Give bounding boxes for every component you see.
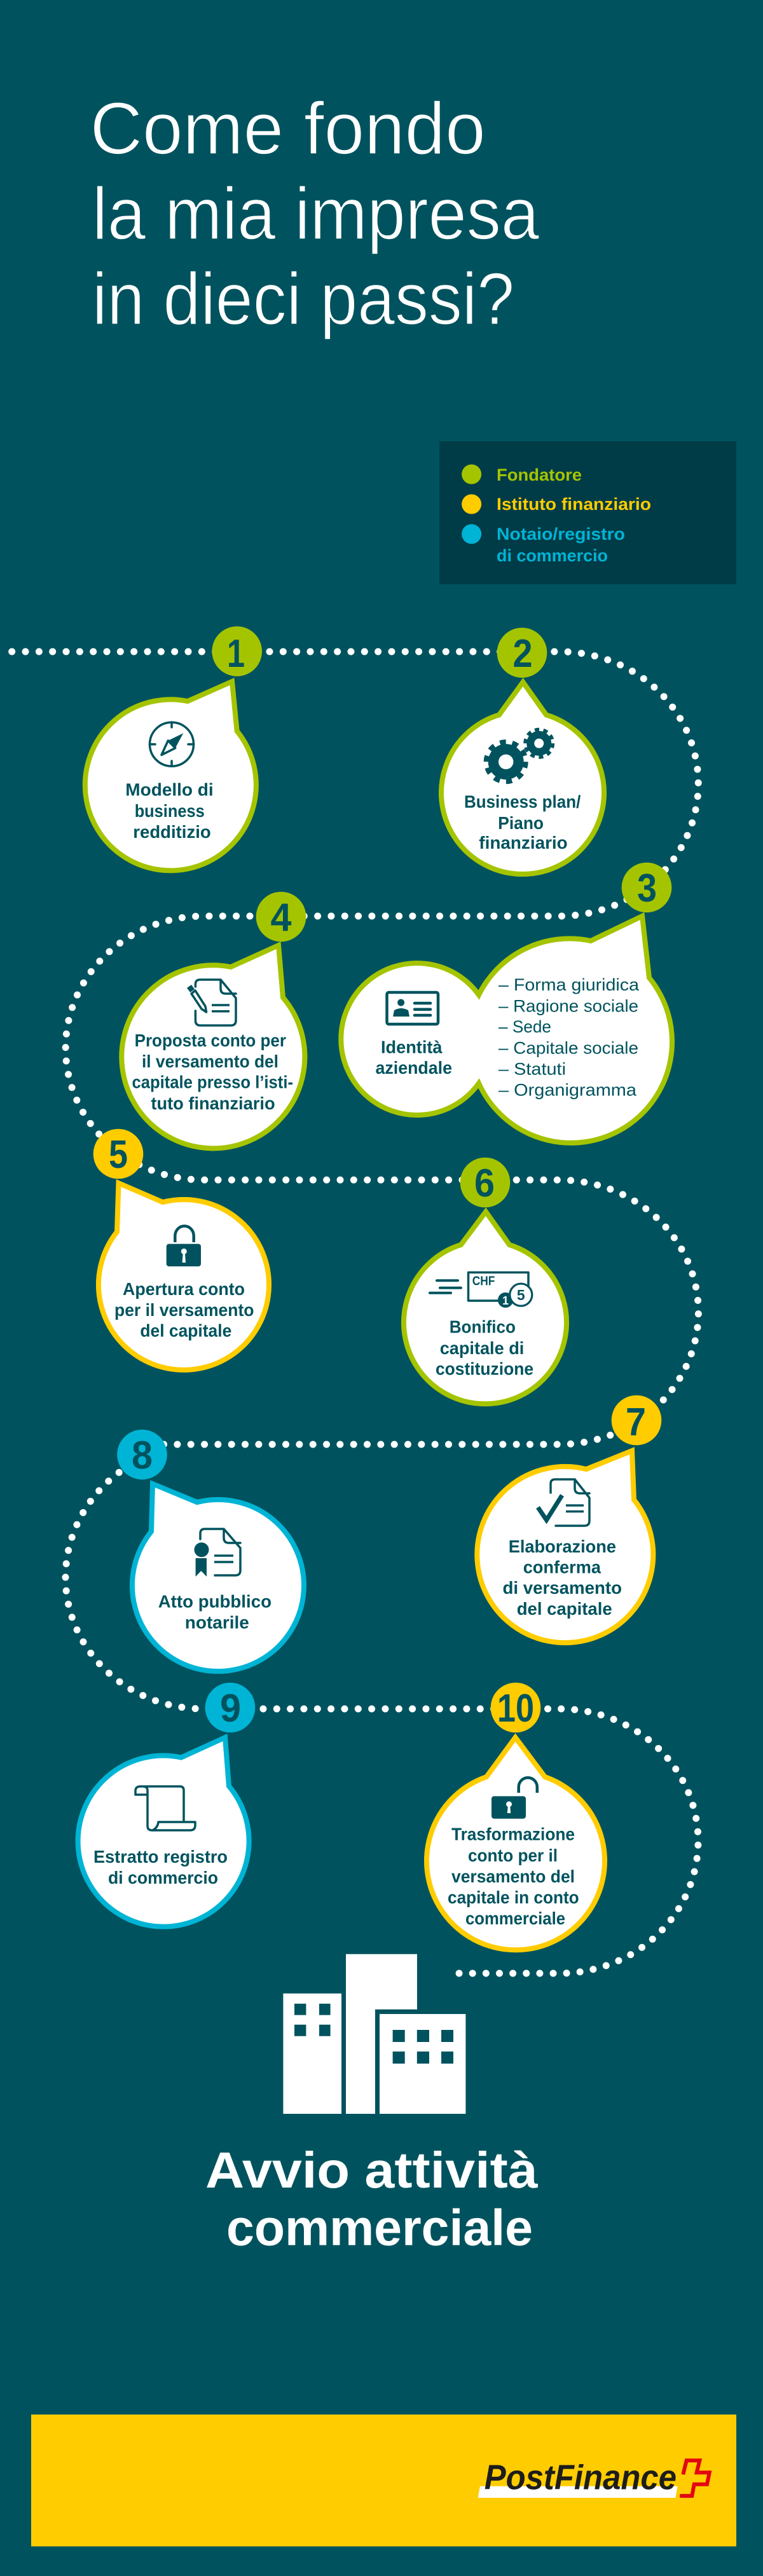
text: bonifico: capitale di	[440, 1338, 524, 1358]
badge 8	[117, 1430, 167, 1479]
text: modello di business: redditizio	[133, 822, 211, 842]
badge 3: 3	[637, 867, 657, 910]
step 9 bubble	[78, 1737, 249, 1927]
text: business plan: Business plan/	[464, 792, 581, 812]
text: estratto registro	[93, 1847, 228, 1887]
icon: document with check	[538, 1479, 589, 1526]
step 2 bubble	[441, 682, 604, 874]
icon: open lock	[491, 1778, 537, 1819]
badge 4: 4	[271, 896, 292, 940]
text: proposta conto	[132, 1031, 293, 1113]
text: business plan: finanziario	[479, 833, 568, 853]
text: modello di business	[125, 780, 214, 842]
badge 9: 9	[220, 1687, 241, 1730]
legend panel: Fondatore	[497, 465, 582, 484]
heading: avvio attivita commerciale: Avvio attività	[205, 2142, 538, 2198]
text: trasformazione: commerciale	[465, 1908, 565, 1928]
text: proposta conto: capitale presso l’isti-	[132, 1072, 293, 1092]
badge 9	[205, 1683, 255, 1732]
text: apertura conto	[114, 1279, 254, 1340]
icon: bank transfer	[430, 1273, 532, 1308]
text: trasformazione	[448, 1825, 579, 1928]
badge 2	[497, 627, 547, 678]
step 3 double bubble	[341, 916, 672, 1143]
badge 1	[212, 626, 262, 676]
text: elaborazione	[502, 1537, 622, 1619]
text: apertura conto: del capitale	[140, 1321, 231, 1340]
text: business plan: Piano	[498, 813, 544, 833]
text: requirements list: – Organigramma	[498, 1081, 637, 1100]
text: requirements list	[498, 975, 640, 1100]
badge 4	[256, 892, 306, 942]
legend panel	[439, 441, 736, 584]
text: identita aziendale: Identità	[381, 1038, 443, 1057]
step 4 bubble	[121, 945, 305, 1148]
PostFinance logo: PostFinance	[485, 2458, 677, 2497]
text: apertura conto: Apertura conto	[123, 1279, 245, 1299]
text: modello di business: business	[135, 801, 205, 821]
text: estratto registro: di commercio	[108, 1868, 218, 1887]
icon: notarial deed	[195, 1529, 240, 1577]
step 1 bubble	[85, 682, 256, 870]
badge 5	[93, 1129, 143, 1179]
text: elaborazione: di versamento	[502, 1578, 622, 1598]
step 8 bubble	[132, 1484, 304, 1671]
icon: office buildings	[283, 1954, 465, 2114]
badge 2: 2	[512, 632, 533, 676]
text: identita aziendale	[375, 1038, 452, 1078]
text: requirements list: – Capitale sociale	[498, 1039, 638, 1058]
badge 1: 1	[227, 632, 245, 676]
text: requirements list: – Sede	[498, 1017, 551, 1036]
title: Come fondo	[90, 87, 486, 170]
badge 10: 10	[497, 1687, 534, 1730]
text: proposta conto: Proposta conto per	[135, 1031, 286, 1050]
icon: document with pen	[187, 980, 236, 1025]
text: proposta conto: tuto finanziario	[151, 1093, 275, 1113]
icon: bank transfer: CHF	[472, 1275, 495, 1289]
text: elaborazione: conferma	[523, 1558, 601, 1577]
badge 6: 6	[474, 1161, 495, 1205]
text: identita aziendale: aziendale	[375, 1058, 452, 1078]
icon: closed lock	[167, 1226, 201, 1266]
step 7 bubble	[477, 1451, 653, 1643]
text: requirements list: – Statuti	[498, 1060, 566, 1079]
legend panel: Istituto finanziario	[497, 495, 651, 514]
text: atto pubblico: Atto pubblico	[158, 1592, 272, 1612]
footer panel	[31, 2415, 736, 2546]
legend panel: di commercio	[497, 546, 608, 565]
badge 7: 7	[626, 1401, 646, 1444]
text: requirements list: – Forma giuridica	[498, 975, 640, 994]
text: modello di business: Modello di	[125, 780, 214, 800]
step 6 bubble	[404, 1212, 567, 1404]
number badges	[93, 626, 671, 1732]
text: bonifico: Bonifico	[450, 1317, 516, 1337]
icon: scroll	[135, 1786, 195, 1830]
text: business plan	[464, 792, 581, 853]
text: trasformazione: versamento del	[451, 1867, 575, 1886]
icon: id card	[387, 992, 438, 1024]
icon: bank transfer: 1	[502, 1294, 509, 1307]
title: la mia impresa	[92, 172, 539, 255]
badge 5: 5	[109, 1133, 128, 1177]
dotted path connecting the steps	[12, 652, 698, 1973]
heading: avvio attivita commerciale	[205, 2142, 538, 2256]
title	[90, 87, 539, 340]
text: trasformazione: Trasformazione	[451, 1825, 575, 1844]
text: bonifico: costituzione	[436, 1359, 533, 1379]
text: trasformazione: capitale in conto	[448, 1887, 579, 1907]
badge 8: 8	[132, 1434, 153, 1477]
text: atto pubblico: notarile	[185, 1613, 249, 1633]
icon: gears	[486, 730, 553, 781]
title: in dieci passi?	[92, 257, 514, 340]
text: bonifico	[436, 1317, 533, 1379]
text: elaborazione: del capitale	[517, 1599, 612, 1619]
step 10 bubble	[427, 1737, 605, 1950]
legend panel: Notaio/registro	[497, 524, 625, 544]
badge 7	[612, 1395, 661, 1445]
text: trasformazione: conto per il	[468, 1846, 558, 1865]
step 5 bubble	[99, 1183, 269, 1370]
text: atto pubblico	[158, 1592, 272, 1633]
text: proposta conto: il versamento del	[142, 1052, 278, 1071]
badge 3	[622, 863, 671, 912]
icon: compass	[150, 722, 193, 766]
icon: bank transfer: 5	[517, 1287, 525, 1303]
text: requirements list: – Ragione sociale	[498, 997, 638, 1016]
text: estratto registro: Estratto registro	[93, 1847, 228, 1867]
badge 6	[460, 1158, 510, 1207]
heading: avvio attivita commerciale: commerciale	[226, 2200, 533, 2256]
text: elaborazione: Elaborazione	[509, 1537, 616, 1556]
text: apertura conto: per il versamento	[114, 1300, 254, 1320]
